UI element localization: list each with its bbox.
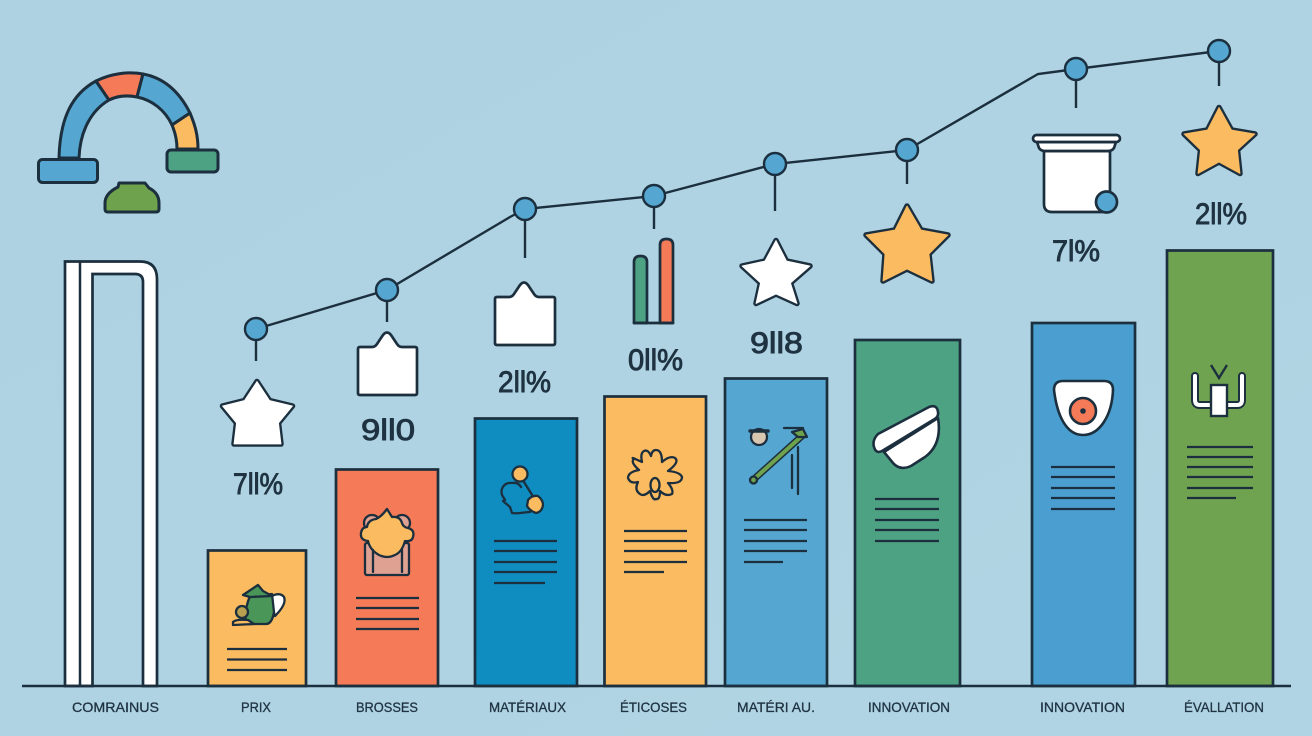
icon: white tag 2 — [495, 282, 555, 345]
label: innovation: INNOVATION — [868, 699, 950, 715]
bar: evaluation — [1167, 250, 1273, 686]
trend line with markers — [245, 40, 1230, 361]
bar: innovation — [855, 340, 960, 686]
icon: white pot — [1033, 135, 1120, 212]
icon: flower outline — [628, 450, 682, 499]
icon: target shield — [1054, 381, 1113, 435]
bar: materi au — [725, 378, 827, 686]
value: 2ll% right: 2ll% — [1195, 198, 1247, 231]
label: materiaux: MATÉRIAUX — [489, 699, 567, 715]
bar: materiaux — [475, 418, 577, 686]
icon: mini bar chart — [634, 239, 673, 323]
value: 9ll8: 9ll8 — [750, 327, 803, 360]
icon: segmented arch logo — [38, 73, 218, 212]
label: innovation 2: INNOVATION — [1040, 699, 1125, 715]
label: evaluation: ÉVALLATION — [1184, 699, 1264, 715]
bar: eticoses — [604, 396, 706, 686]
icon: tree in box — [361, 509, 413, 575]
icon: white star 2 — [742, 240, 810, 304]
bar: prix — [208, 550, 306, 686]
baseline axis — [22, 685, 1291, 687]
icon: yellow star large — [866, 206, 948, 281]
icon: white star 1 — [222, 382, 292, 444]
label: comrainus: COMRAINUS — [72, 699, 159, 715]
value: 9ll0: 9ll0 — [361, 414, 415, 447]
label: prix: PRIX — [241, 699, 272, 715]
label: materi au: MATÉRI AU. — [737, 699, 815, 715]
bar: white frame — [65, 262, 157, 686]
icon: molecule cloud — [502, 466, 543, 513]
bar: innovation 2 — [1032, 323, 1135, 686]
label: brosses: BROSSES — [356, 699, 418, 715]
value: 7ll%: 7ll% — [233, 468, 283, 501]
icon: white bowl — [874, 406, 939, 468]
icon: white tag 1 — [358, 332, 417, 395]
value: 0ll%: 0ll% — [628, 344, 683, 377]
value: 2ll%: 2ll% — [498, 366, 551, 399]
icon: tool with seal — [750, 428, 807, 494]
value: 7l%: 7l% — [1052, 235, 1100, 268]
bar: brosses — [336, 470, 438, 686]
icon: yellow star right — [1184, 108, 1255, 174]
label: eticoses: ÉTICOSES — [620, 699, 687, 715]
icon: teapot — [233, 585, 285, 625]
icon: u-shaped holder — [1195, 365, 1242, 416]
